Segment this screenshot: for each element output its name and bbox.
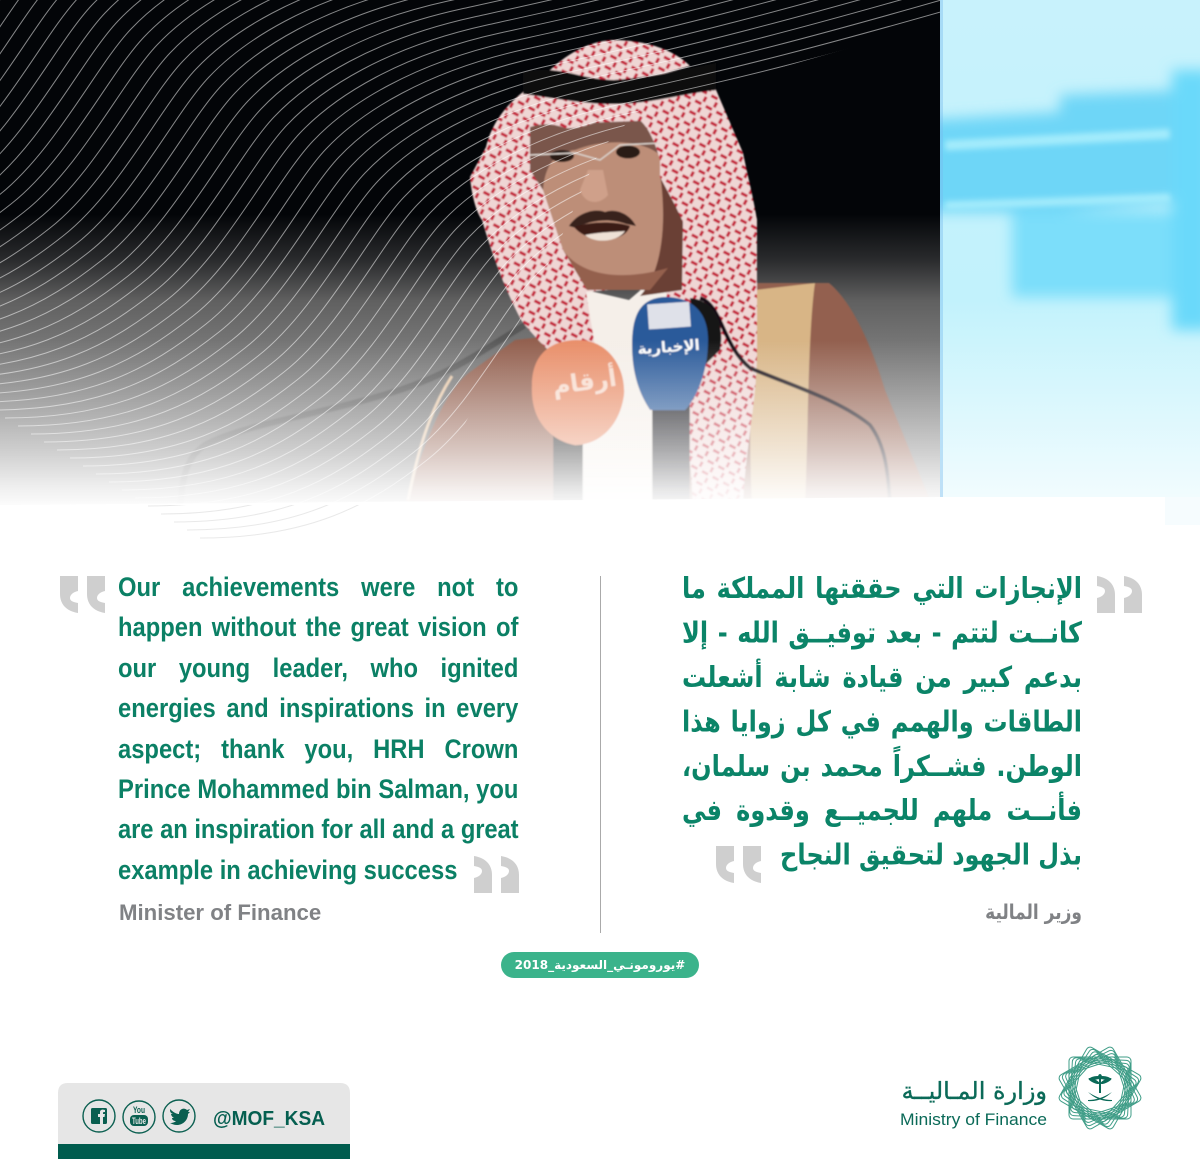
icon: youtube [123, 1101, 155, 1133]
jaw shadow [640, 173, 683, 296]
quote mark: english opening [60, 576, 105, 613]
icon: youtube: Tube [132, 1116, 146, 1126]
english quote text: example in achieving success [118, 855, 457, 885]
english quote text [118, 572, 518, 885]
arabic quote text: بذل الجهود لتحقيق النجاح [780, 839, 1082, 872]
faint wave lines on white [148, 505, 358, 538]
arabic quote text: الوطن. فشــكراً محمد بن سلمان، [682, 750, 1082, 783]
blue microphone stem [652, 400, 690, 505]
blue microphone label: الإخبارية [637, 336, 700, 358]
left microphone gooseneck [180, 325, 525, 510]
arabic quote text [682, 572, 1082, 872]
right microphone gooseneck [700, 298, 890, 505]
eyes and glasses [530, 143, 660, 162]
black headband [523, 63, 716, 104]
english quote text: our young leader, who ignited [118, 653, 518, 683]
arabic quote text: الإنجازات التي حققتها المملكة ما [682, 572, 1082, 605]
photo backdrop gradient [0, 0, 1200, 510]
social panel [58, 1083, 350, 1159]
orange microphone label: أرقام [550, 362, 618, 400]
thobe [560, 270, 690, 505]
chin shadow [563, 250, 668, 290]
orange microphone [532, 340, 624, 445]
english quote text: are an inspiration for all and a great [118, 814, 518, 844]
icon: youtube: You [133, 1105, 145, 1115]
arabic quote text: كانــت لتتم - بعد توفيــق الله - إلا [682, 616, 1082, 650]
decorative wave lines [0, 0, 940, 488]
screen upper band [925, 70, 1200, 330]
quote mark: arabic opening [1097, 576, 1142, 613]
english quote text: energies and inspirations in every [118, 693, 518, 723]
logo arabic name: وزارة المـاليــة [902, 1077, 1047, 1105]
arabic quote text: الطاقات والهمم في كل زوايا هذا [682, 705, 1082, 739]
teeth [585, 231, 625, 241]
headscarf crown [548, 40, 690, 88]
logo centre disc [1078, 1066, 1122, 1110]
arabic quote text: فأنــت ملهم للجميــع وقدوة في [682, 794, 1082, 828]
logo english name: Ministry of Finance [900, 1110, 1047, 1129]
forehead shadow [530, 120, 662, 190]
english quote text: Our achievements were not to [118, 572, 518, 602]
english quote text: Prince Mohammed bin Salman, you [118, 774, 518, 804]
panel footer bar [58, 1144, 350, 1159]
side flap [660, 90, 757, 300]
quote mark: english closing [474, 856, 519, 893]
white stage panel [0, 497, 1200, 600]
face [530, 125, 676, 287]
hashtag pill [501, 952, 699, 978]
blue microphone logo [647, 302, 691, 329]
blue microphone [632, 297, 708, 410]
arabic attribution: وزير المالية [985, 901, 1082, 925]
screen lower block [1012, 212, 1200, 297]
screen light stripes [945, 129, 1170, 210]
speaker figure [180, 40, 932, 510]
headscarf [470, 90, 757, 505]
logo rosette [1058, 1046, 1142, 1130]
logo palm and swords [1088, 1074, 1112, 1101]
english attribution: Minister of Finance [119, 900, 321, 925]
blue microphone windscreen shadow [690, 298, 721, 370]
english quote text: happen without the great vision of [118, 612, 518, 642]
forehead fold [500, 100, 666, 160]
orange microphone stem [553, 415, 583, 505]
cloak [405, 283, 932, 505]
screen right column [1172, 70, 1200, 330]
cloak gold trim [750, 283, 815, 505]
column divider [600, 576, 601, 933]
moustache [569, 211, 636, 228]
mouth [574, 222, 630, 240]
cloak left trim [408, 376, 452, 500]
english quote text: aspect; thank you, HRH Crown [118, 734, 518, 764]
screen left edge [940, 0, 943, 500]
stage panel right notch [1165, 497, 1200, 525]
ministry logo [900, 1046, 1142, 1130]
icon: facebook [83, 1100, 115, 1132]
blue event screen [925, 0, 1200, 500]
bottom white fade [0, 340, 1200, 510]
icon: twitter [163, 1100, 195, 1132]
panel background [58, 1083, 350, 1159]
quote mark: arabic closing [716, 846, 761, 883]
arabic quote text: بدعم كبير من قيادة شابة أشعلت [682, 661, 1082, 694]
social handle: @MOF_KSA [213, 1108, 325, 1130]
hashtag pill: #يورومونـي_السعودية_2018 [515, 958, 685, 973]
nose shading [580, 170, 608, 202]
